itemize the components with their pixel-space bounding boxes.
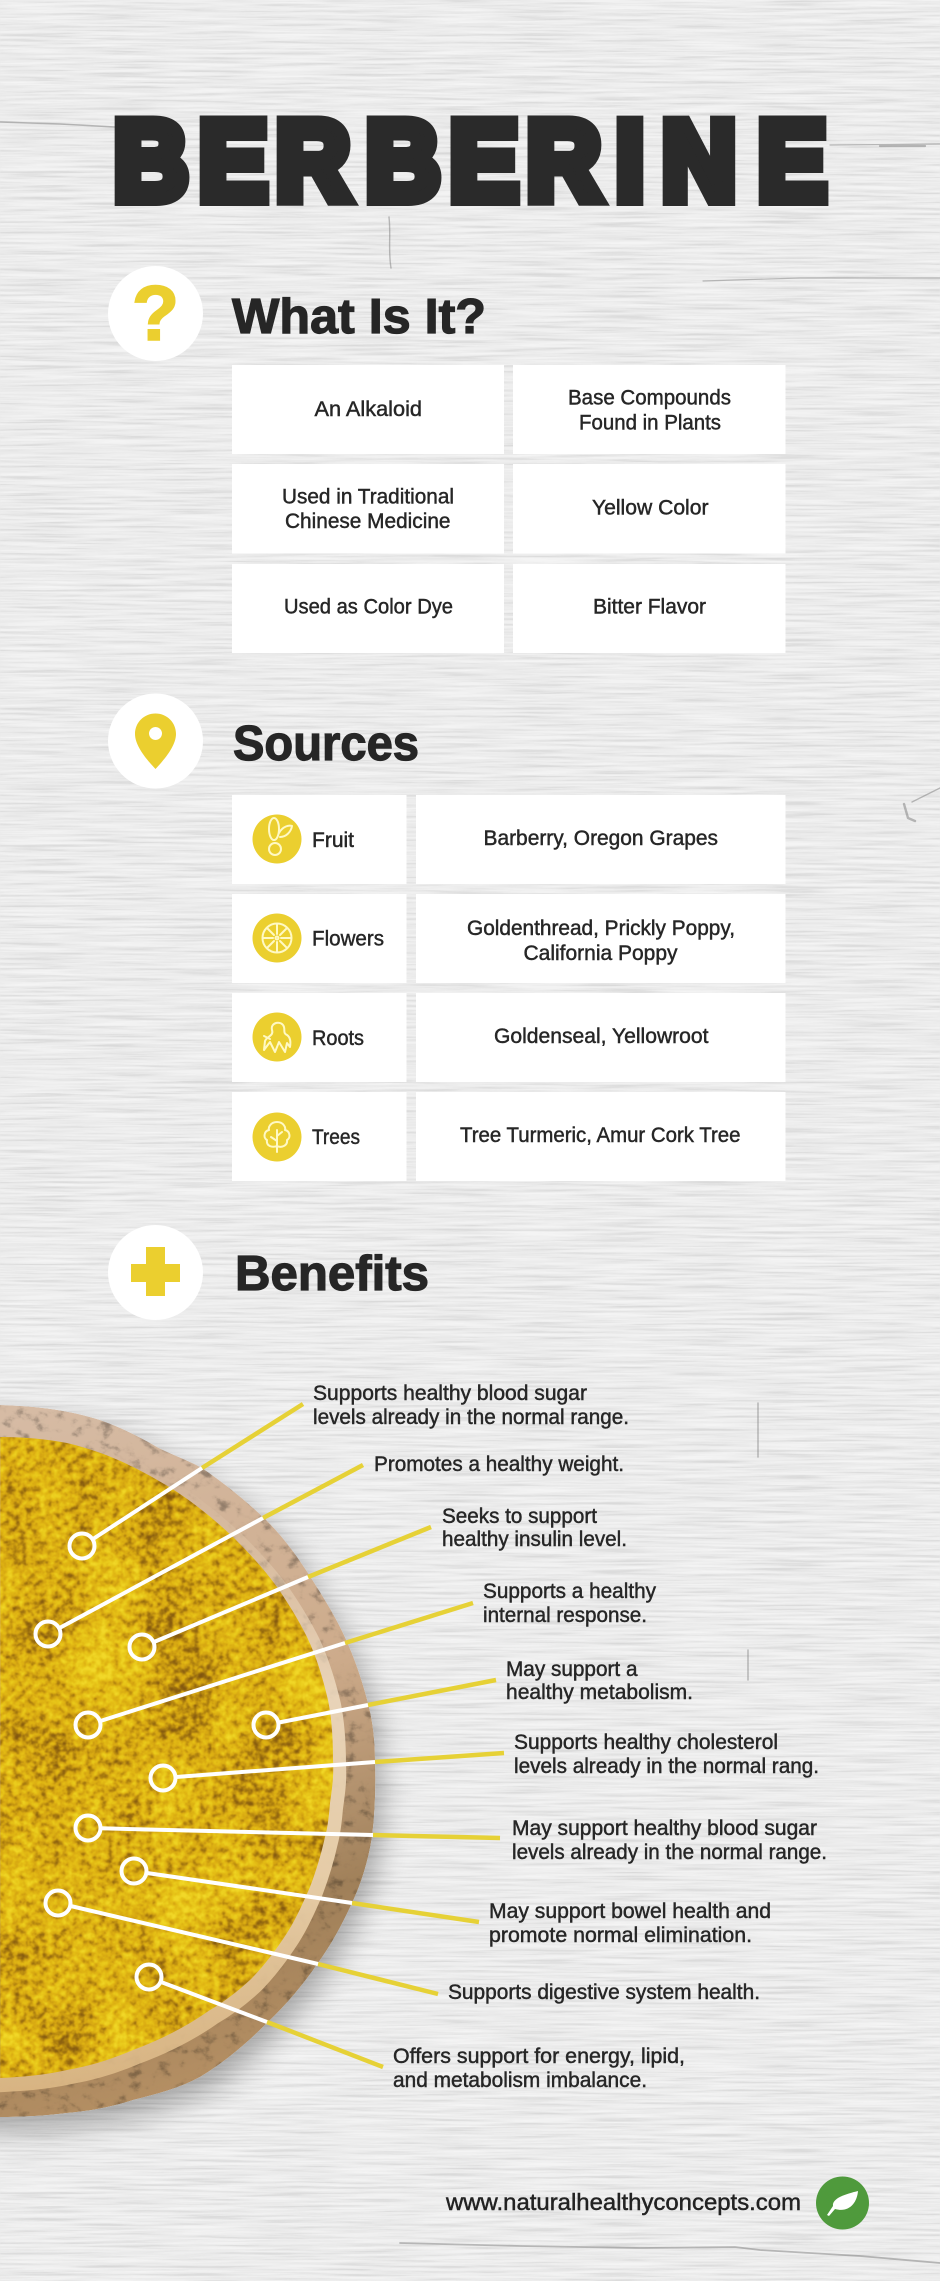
footer url: www.naturalhealthyconcepts.com: [445, 2189, 801, 2215]
benefit 1: [313, 1382, 629, 1429]
icon: question mark: ?: [132, 269, 179, 357]
title: BERBERINE: [114, 99, 826, 223]
row: flowers sources: California Poppy: [524, 942, 678, 965]
card: traditional chinese medicine: Chinese Medicine: [285, 510, 450, 533]
row: fruit label: [232, 795, 406, 884]
card: yellow color: Yellow Color: [592, 496, 709, 520]
icon: plus: [108, 1225, 203, 1320]
row: fruit sources: Barberry, Oregon Grapes: [484, 827, 718, 850]
pointer 9: [46, 1890, 438, 1994]
row: fruit sources: [416, 795, 786, 884]
benefit 5: [506, 1658, 693, 1704]
benefit 8: promote normal elimination.: [489, 1924, 752, 1947]
card: base compounds: Base Compounds: [568, 386, 731, 410]
heading: sources: Sources: [233, 717, 419, 771]
row: roots label: [232, 993, 406, 1082]
benefit 9: Supports digestive system health.: [448, 1981, 760, 2004]
benefit 4: [483, 1580, 656, 1627]
benefit 8: [489, 1900, 771, 1947]
pointer 6: [150, 1753, 504, 1790]
pointer 2: [36, 1465, 363, 1646]
row: trees sources: [416, 1092, 786, 1181]
pointer lines: [36, 1404, 504, 2067]
card: color dye: Used as Color Dye: [284, 596, 453, 618]
benefit 3: healthy insulin level.: [442, 1528, 627, 1551]
benefit 6: levels already in the normal rang.: [514, 1755, 819, 1778]
benefit 2: Promotes a healthy weight.: [374, 1453, 624, 1476]
pointer 5: [254, 1680, 496, 1738]
icon: location pin: [108, 694, 203, 788]
heading: benefits: Benefits: [235, 1247, 429, 1301]
row: flowers sources: Goldenthread, Prickly Poppy,: [467, 917, 735, 940]
pointer 4: [76, 1603, 473, 1738]
card: an alkaloid: An Alkaloid: [314, 398, 422, 421]
card: traditional chinese medicine: [232, 464, 504, 554]
row: trees sources: Tree Turmeric, Amur Cork Tree: [460, 1124, 740, 1147]
row: fruit label: Fruit: [312, 829, 354, 852]
benefit 3: [442, 1505, 627, 1551]
benefit 5: healthy metabolism.: [506, 1681, 693, 1704]
benefit 6: Supports healthy cholesterol: [514, 1731, 778, 1754]
benefit 1: Supports healthy blood sugar: [313, 1382, 587, 1405]
pointer 10: [136, 1964, 383, 2067]
benefit 7: [512, 1817, 827, 1864]
section: what is it: [108, 266, 786, 653]
benefit 7: levels already in the normal range.: [512, 1841, 827, 1864]
card: base compounds: [513, 365, 786, 454]
row: trees label: Trees: [312, 1126, 360, 1149]
row: roots label: Roots: [312, 1027, 364, 1050]
benefit 10: and metabolism imbalance.: [393, 2069, 647, 2092]
card: an alkaloid: [232, 365, 504, 454]
pointer 1: [70, 1404, 303, 1558]
row: flowers sources: [416, 894, 786, 983]
pointer 8: [122, 1858, 479, 1922]
row: flowers label: Flowers: [312, 928, 384, 950]
benefit 10: Offers support for energy, lipid,: [393, 2045, 685, 2068]
benefit 5: May support a: [506, 1658, 638, 1681]
benefit 4: Supports a healthy: [483, 1580, 656, 1603]
card: base compounds: Found in Plants: [579, 412, 721, 434]
icon: green leaf logo: [816, 2176, 869, 2230]
pointer 7: [76, 1816, 500, 1840]
benefit 7: May support healthy blood sugar: [512, 1817, 817, 1840]
card: traditional chinese medicine: Used in Traditional: [282, 486, 454, 508]
benefit 6: [514, 1731, 819, 1778]
card: color dye: [232, 564, 504, 653]
benefit 8: May support bowel health and: [489, 1900, 771, 1923]
card: yellow color: [513, 464, 786, 554]
card: bitter flavor: Bitter Flavor: [593, 596, 706, 618]
benefit 3: Seeks to support: [442, 1505, 597, 1528]
benefit 4: internal response.: [483, 1604, 647, 1627]
card: bitter flavor: [513, 564, 786, 653]
row: trees label: [232, 1092, 406, 1181]
icon: question mark: [108, 266, 203, 361]
section: sources: [108, 694, 786, 1181]
row: flowers label: [232, 894, 406, 983]
bowl of yellow powder: [0, 1405, 382, 2130]
row: roots sources: [416, 993, 786, 1082]
row: roots sources: Goldenseal, Yellowroot: [494, 1025, 709, 1048]
pointer 3: [130, 1527, 431, 1660]
benefit 1: levels already in the normal range.: [313, 1406, 629, 1429]
heading: what is it: What Is It?: [232, 290, 486, 344]
benefit 10: [393, 2045, 685, 2092]
benefit labels: [313, 1382, 827, 2092]
